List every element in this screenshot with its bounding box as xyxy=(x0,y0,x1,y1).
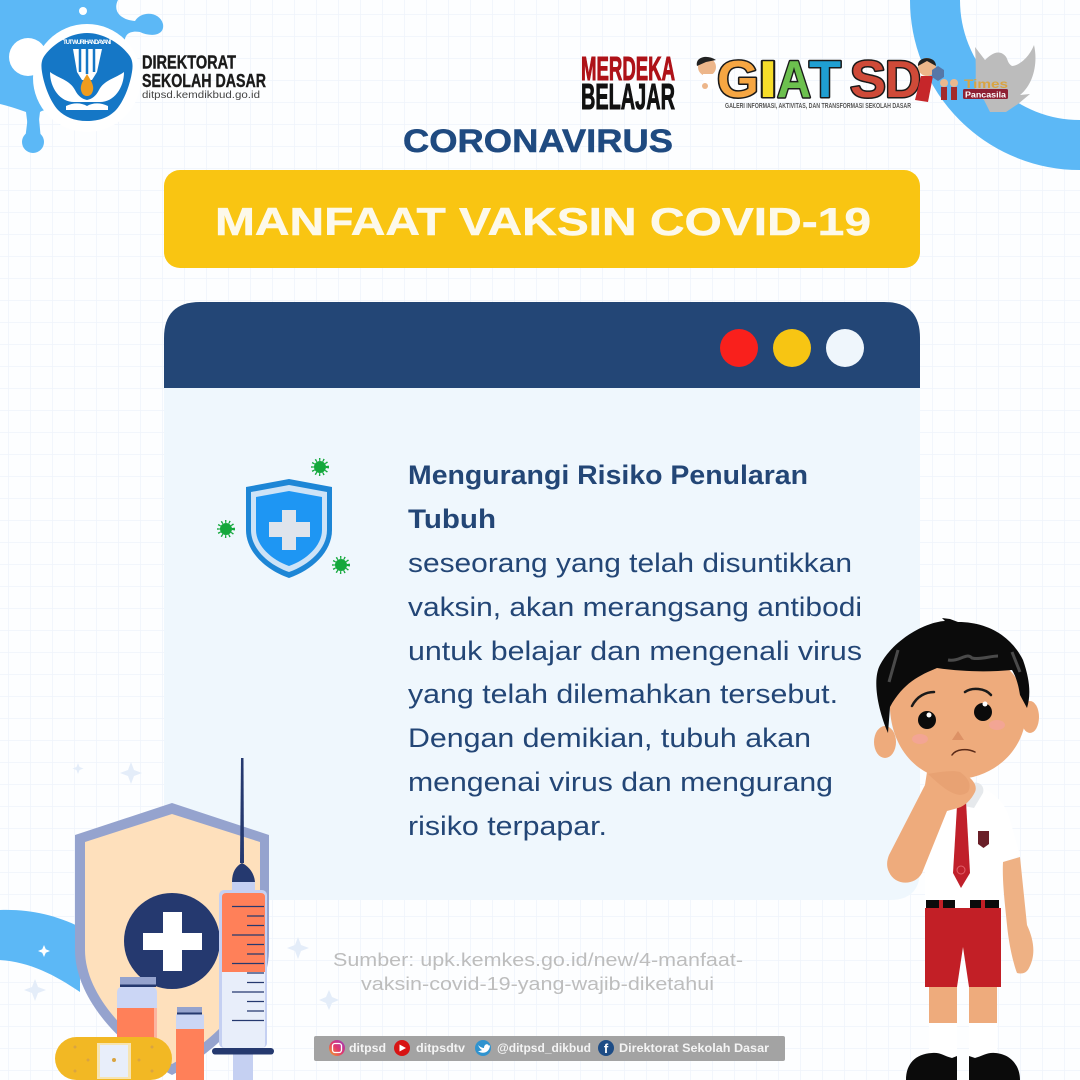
text: benefit description: untuk belajar dan mengenali virus xyxy=(408,636,862,666)
logo: Merdeka Belajar: BELAJAR xyxy=(581,76,675,117)
window dots xyxy=(720,329,864,367)
eyebrows xyxy=(912,689,991,706)
panel: browser window card xyxy=(164,302,920,900)
logo: Giat SD: GALERI INFORMASI, AKTIVITAS, DAN TRANSFORMASI SEKOLAH DASAR xyxy=(725,103,911,110)
panel body xyxy=(164,380,920,900)
decoration: faint sparkles xyxy=(24,762,339,1010)
shoes xyxy=(906,1053,1020,1080)
text: source citation: vaksin-covid-19-yang-wajib-diketahui xyxy=(361,974,714,994)
text: Direktorat Sekolah Dasar wordmark: SEKOLAH DASAR xyxy=(142,71,266,91)
logo: Times Pancasila: Pancasila xyxy=(965,90,1007,100)
vial: small xyxy=(176,1007,204,1080)
logo: Giat SD xyxy=(697,51,936,110)
nose xyxy=(952,731,964,740)
text: social handles: ditpsd xyxy=(349,1041,386,1055)
icon: twitter xyxy=(475,1040,491,1056)
logo: Giat SD: D xyxy=(885,51,921,109)
logo: Kemendikbud emblem xyxy=(41,33,133,121)
face xyxy=(890,653,1026,779)
shield xyxy=(75,803,269,1075)
text: benefit description: mengenai virus dan mengurang xyxy=(408,767,833,797)
window title bar xyxy=(164,302,920,388)
text: social handles: ditpsdtv xyxy=(416,1041,465,1055)
hair xyxy=(876,618,1029,733)
icon: bandage xyxy=(55,1037,172,1080)
logo: Merdeka Belajar: MERDEKA xyxy=(581,50,675,87)
logo: Giat SD: G xyxy=(717,51,759,109)
banner: Manfaat Vaksin COVID-19: MANFAAT VAKSIN COVID-19 xyxy=(215,201,871,244)
logo: Giat SD: T xyxy=(809,51,841,109)
illustration: shield with vaccine items xyxy=(55,758,274,1080)
text: social handles: @ditpsd_dikbud xyxy=(497,1041,591,1055)
ears xyxy=(874,701,1039,758)
text: benefit description: seseorang yang telah disuntikkan xyxy=(408,548,852,578)
shorts and belt xyxy=(925,900,1001,987)
text: Direktorat Sekolah Dasar wordmark: ditpsd.kemdikbud.go.id xyxy=(142,89,260,101)
logo: Giat SD: A xyxy=(777,51,811,109)
eyes xyxy=(918,702,992,729)
footer: social media bar xyxy=(314,1036,785,1061)
icon: Giat SD left mascot xyxy=(697,57,718,90)
raised arm and hand xyxy=(887,769,976,883)
logo: Merdeka Belajar xyxy=(581,50,675,117)
text: source citation: Sumber: upk.kemkes.go.id/new/4-manfaat- xyxy=(333,950,743,970)
logo: Giat SD: I xyxy=(758,51,778,109)
icon: facebook: f xyxy=(604,1041,609,1056)
text: social handles: Direktorat Sekolah Dasar xyxy=(619,1041,769,1055)
logo: Times Pancasila: Times xyxy=(964,77,1008,91)
text: benefit description: yang telah dilemahkan tersebut. xyxy=(408,679,838,709)
text: benefit description xyxy=(408,460,862,841)
text: benefit description: vaksin, akan merangsang antibodi xyxy=(408,592,862,622)
icon: instagram xyxy=(329,1040,345,1056)
text: benefit description: Mengurangi Risiko Penularan xyxy=(408,460,808,490)
logo: Kemendikbud emblem: TUT WURI HANDAYANI xyxy=(63,40,111,46)
logo: Garuda silhouette xyxy=(975,45,1035,112)
icon: facebook xyxy=(598,1040,614,1056)
decoration: bottom left blue arc xyxy=(0,910,80,992)
logo: Times Pancasila xyxy=(932,66,1008,100)
text: source citation xyxy=(333,950,743,994)
hair highlights xyxy=(889,650,1020,682)
legs xyxy=(929,985,997,1024)
icon: youtube xyxy=(394,1040,410,1056)
icon: medical cross circle xyxy=(124,893,220,989)
mouth xyxy=(952,750,975,755)
decoration: top left blue splash xyxy=(0,0,163,153)
text: social handles xyxy=(349,1041,769,1055)
icon: shield with viruses xyxy=(218,460,348,578)
syringe xyxy=(212,758,274,1080)
illustration: thinking schoolboy xyxy=(874,618,1039,1080)
text: benefit description: Tubuh xyxy=(408,504,496,534)
right arm xyxy=(1003,857,1033,973)
socks xyxy=(929,1023,997,1057)
shirt xyxy=(922,785,1020,900)
text: Direktorat Sekolah Dasar wordmark xyxy=(142,52,266,101)
heading: Coronavirus: CORONAVIRUS xyxy=(403,123,673,159)
icon: Giat SD right mascot xyxy=(915,58,936,102)
shirt badge xyxy=(978,831,989,848)
text: Direktorat Sekolah Dasar wordmark: DIREKTORAT xyxy=(142,52,236,72)
banner: Manfaat Vaksin COVID-19 xyxy=(164,170,920,268)
vial: large xyxy=(117,977,157,1042)
logo: Giat SD: S xyxy=(850,51,886,109)
text: benefit description: Dengan demikian, tubuh akan xyxy=(408,723,811,753)
tie xyxy=(953,801,970,888)
text: benefit description: risiko terpapar. xyxy=(408,811,607,841)
decoration: top right blue ring xyxy=(935,0,1080,145)
chin fingers xyxy=(928,771,970,795)
shirt collar xyxy=(964,783,983,808)
cheeks xyxy=(912,720,1005,744)
